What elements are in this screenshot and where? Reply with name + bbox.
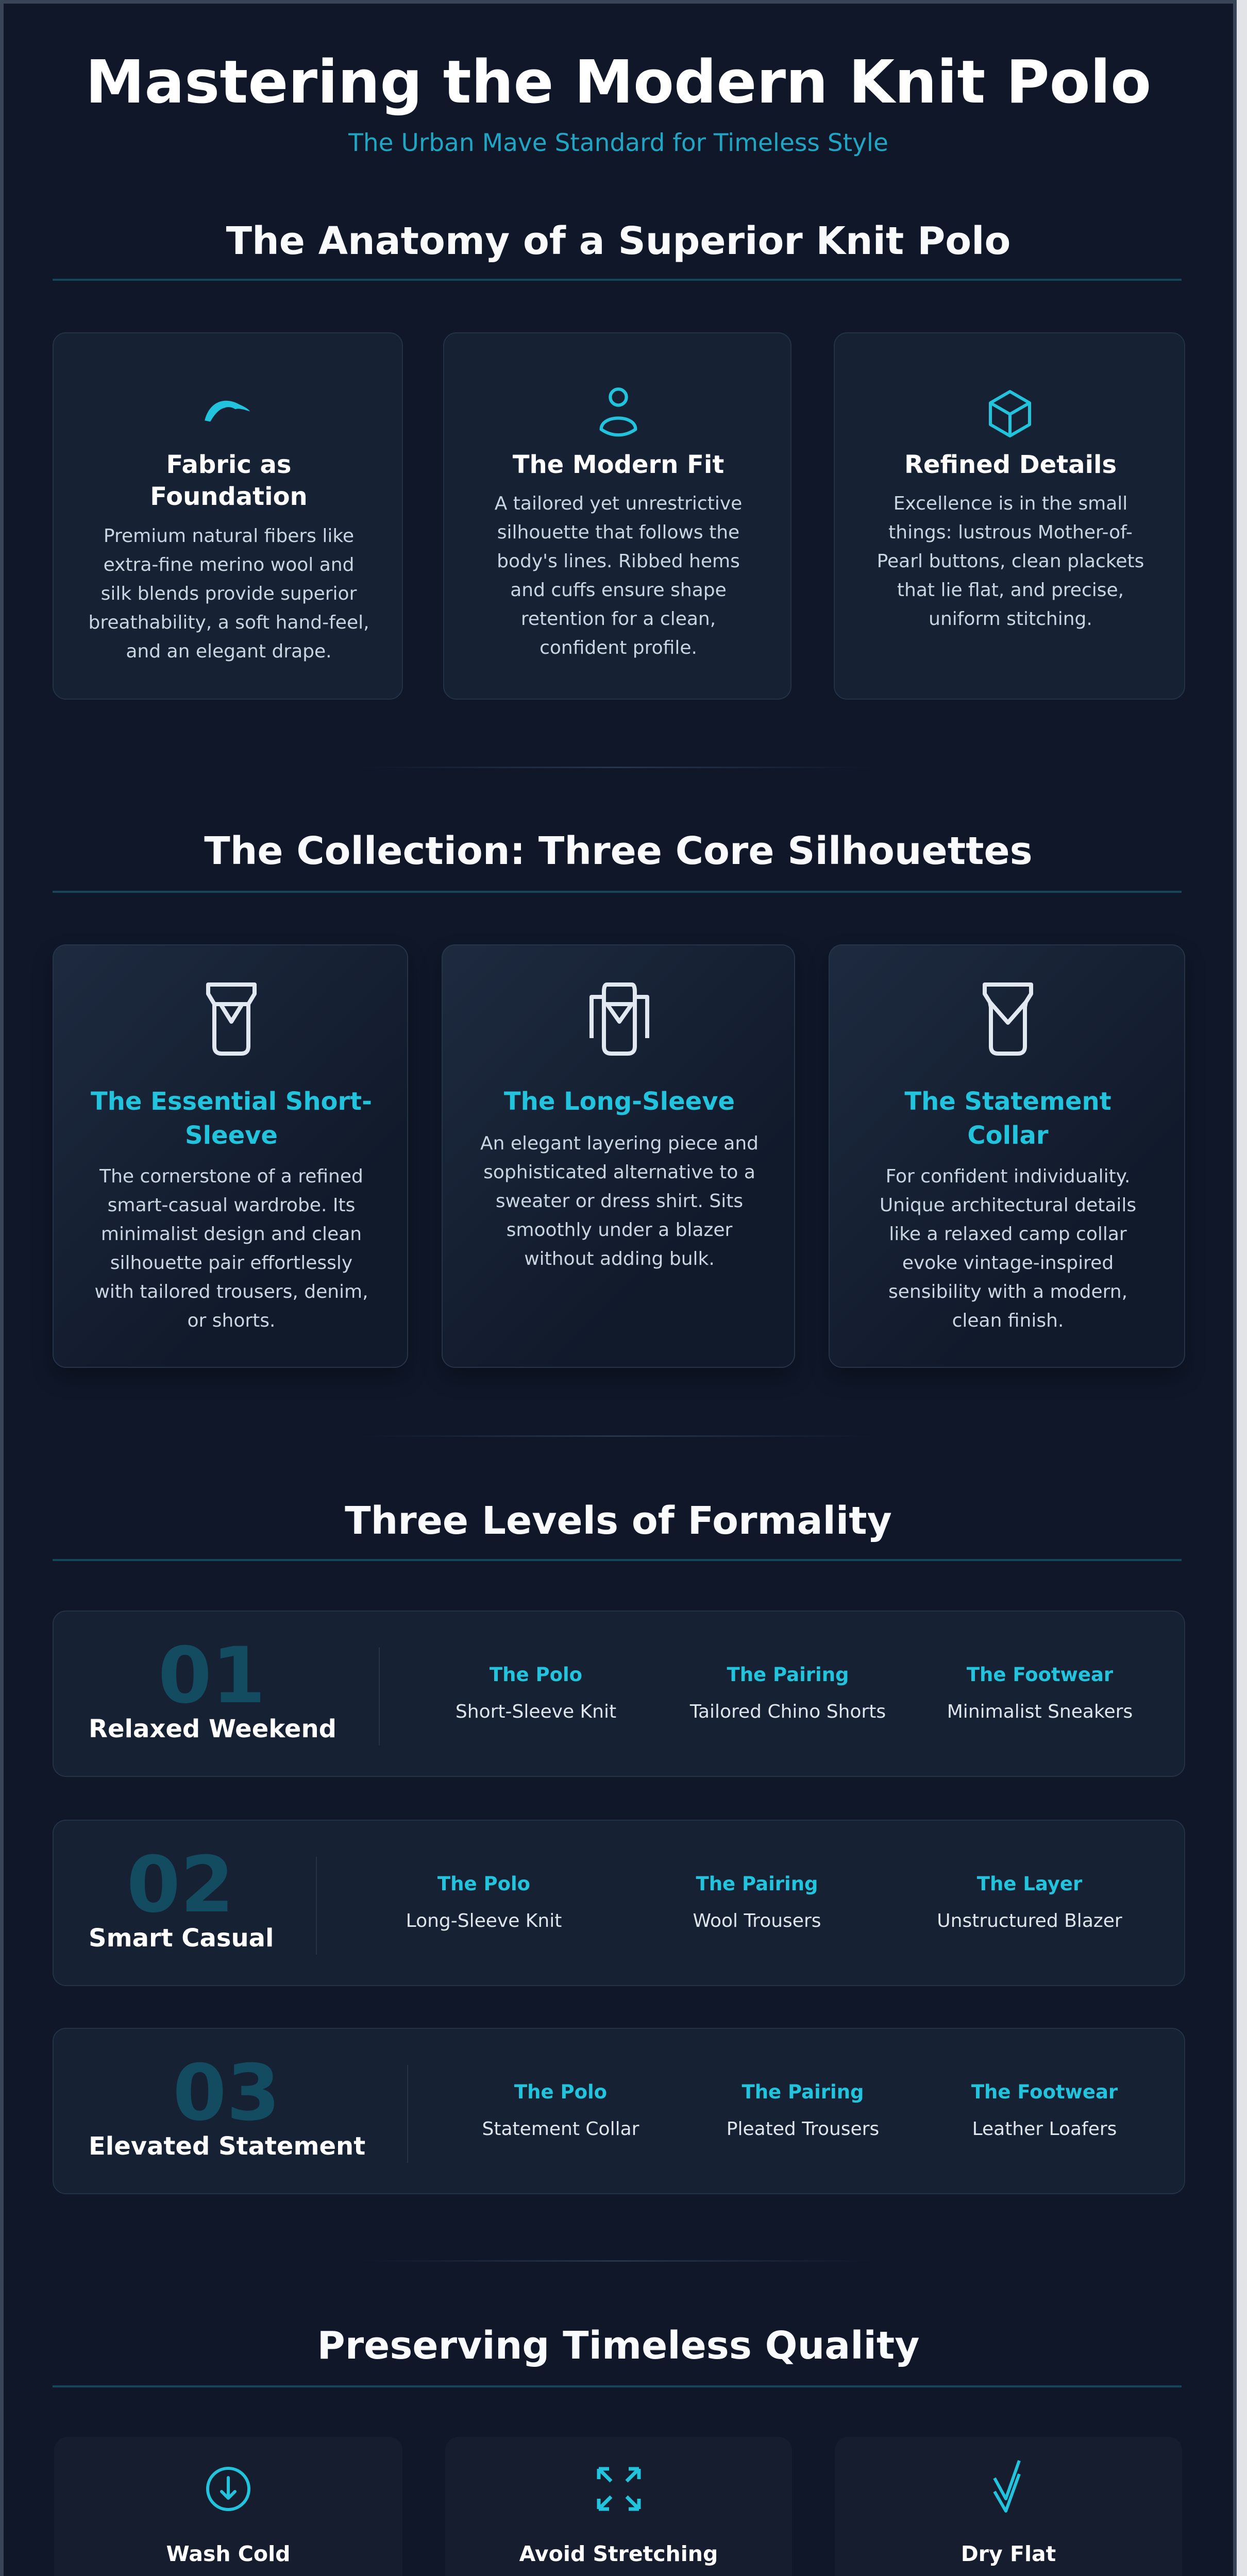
- panel: level 01: Minimalist Sneakers: [947, 1701, 1133, 1722]
- number + label: [89, 1631, 336, 1743]
- panel: level 01: The Footwear: [967, 1664, 1113, 1686]
- items: [406, 1873, 562, 1931]
- panel: fabric: [53, 332, 403, 700]
- panel: level 03: Pleated Trousers: [727, 2119, 879, 2140]
- panel: level 01: [53, 1611, 1185, 1777]
- items: The Polo: [490, 1664, 582, 1686]
- text: Premium natural fibers like extra-fine merino wool and silk blends provide superior breathability, a soft hand-feel, and an elegant drape.: [88, 526, 369, 662]
- panel: details: [834, 332, 1185, 700]
- panel: fit: [443, 332, 791, 700]
- heading: [904, 1087, 1111, 1150]
- number + label: [89, 1840, 274, 1953]
- items: [482, 2081, 639, 2140]
- text: Excellence is in the small things: lustrous Mother-of-Pearl buttons, clean plackets that lie flat, and precise, uniform stitching.: [877, 493, 1144, 630]
- panel: level 01: The Pairing: [727, 1664, 849, 1686]
- heading: Wash Cold: [166, 2541, 290, 2566]
- icon: long sleeve polo: [589, 982, 649, 1056]
- items: Statement Collar: [482, 2119, 639, 2140]
- panel: level 03: Leather Loafers: [972, 2119, 1117, 2140]
- number + label: [89, 2048, 365, 2161]
- number + label: 03: [173, 2048, 280, 2138]
- panel: avoid stretching: [445, 2437, 792, 2576]
- panel: level 02: Wool Trousers: [693, 1910, 821, 1931]
- heading: Avoid Stretching: [519, 2541, 718, 2566]
- subtitle: The Urban Mave Standard for Timeless Style: [348, 129, 888, 157]
- heading: The Essential Short-: [91, 1087, 372, 1116]
- panel: level 03: The Footwear: [971, 2081, 1118, 2103]
- icon: collar polo: [983, 982, 1033, 1056]
- panel: level 01: Tailored Chino Shorts: [690, 1701, 886, 1722]
- panel: short sleeve: [53, 944, 408, 1368]
- heading: [150, 450, 308, 511]
- text: A tailored yet unrestrictive silhouette that follows the body's lines. Ribbed hems and cuffs ensure shape retention for a clean, confident profile.: [495, 493, 742, 658]
- heading: The Modern Fit: [513, 450, 724, 479]
- heading: care: Preserving Timeless Quality: [317, 2324, 920, 2368]
- heading: Sleeve: [185, 1121, 278, 1150]
- items: The Polo: [437, 1873, 530, 1895]
- panel: level 02: The Pairing: [696, 1873, 818, 1895]
- panel: level 02: The Layer: [977, 1873, 1082, 1895]
- text: An elegant layering piece and sophisticated alternative to a sweater or dress shirt. Sits smoothly under a blazer without adding bulk.: [480, 1133, 759, 1269]
- heading: formality: Three Levels of Formality: [345, 1499, 892, 1543]
- panel: long sleeve: [442, 944, 795, 1368]
- icon: cube: [989, 390, 1031, 437]
- items: The Polo: [514, 2081, 607, 2103]
- text: The cornerstone of a refined smart-casual wardrobe. Its minimalist design and clean silhouette pair effortlessly with tailored trousers, denim, or shorts.: [94, 1166, 368, 1331]
- panel: level 02: Unstructured Blazer: [937, 1910, 1122, 1931]
- heading: Collar: [967, 1121, 1049, 1150]
- heading: [91, 1087, 372, 1150]
- panel: level 03: The Pairing: [742, 2081, 864, 2103]
- heading: Fabric as: [166, 450, 291, 479]
- number + label: Relaxed Weekend: [89, 1715, 336, 1743]
- text: For confident individuality. Unique architectural details like a relaxed camp collar evoke vintage-inspired sensibility with a modern, clean finish.: [880, 1166, 1136, 1331]
- heading: anatomy: The Anatomy of a Superior Knit Polo: [226, 219, 1010, 263]
- heading: collection: The Collection: Three Core Silhouettes: [204, 829, 1033, 873]
- heading: Foundation: [150, 482, 308, 511]
- number + label: Smart Casual: [89, 1924, 274, 1953]
- number + label: Elevated Statement: [89, 2132, 365, 2161]
- heading: Dry Flat: [961, 2541, 1056, 2566]
- title: Mastering the Modern Knit Polo: [86, 48, 1151, 117]
- items: Long-Sleeve Knit: [406, 1910, 562, 1931]
- number + label: 02: [127, 1840, 234, 1930]
- icon: minimize arrows: [597, 2467, 641, 2511]
- heading: The Statement: [904, 1087, 1111, 1116]
- icon: fabric: [205, 401, 250, 421]
- heading: The Long-Sleeve: [504, 1087, 735, 1116]
- icon: person: [600, 387, 637, 437]
- panel: statement collar: [829, 944, 1185, 1368]
- panel: level 03: [53, 2028, 1185, 2194]
- icon: polo: [206, 982, 257, 1056]
- icon: double check: [993, 2460, 1021, 2513]
- items: [456, 1664, 616, 1722]
- panel: level 02: [53, 1820, 1185, 1986]
- heading: Refined Details: [904, 450, 1117, 479]
- panel: dry flat: [835, 2437, 1182, 2576]
- number + label: 01: [158, 1631, 265, 1721]
- panel: wash cold: [54, 2437, 402, 2576]
- items: Short-Sleeve Knit: [456, 1701, 616, 1722]
- icon: down arrow circle: [206, 2467, 250, 2511]
